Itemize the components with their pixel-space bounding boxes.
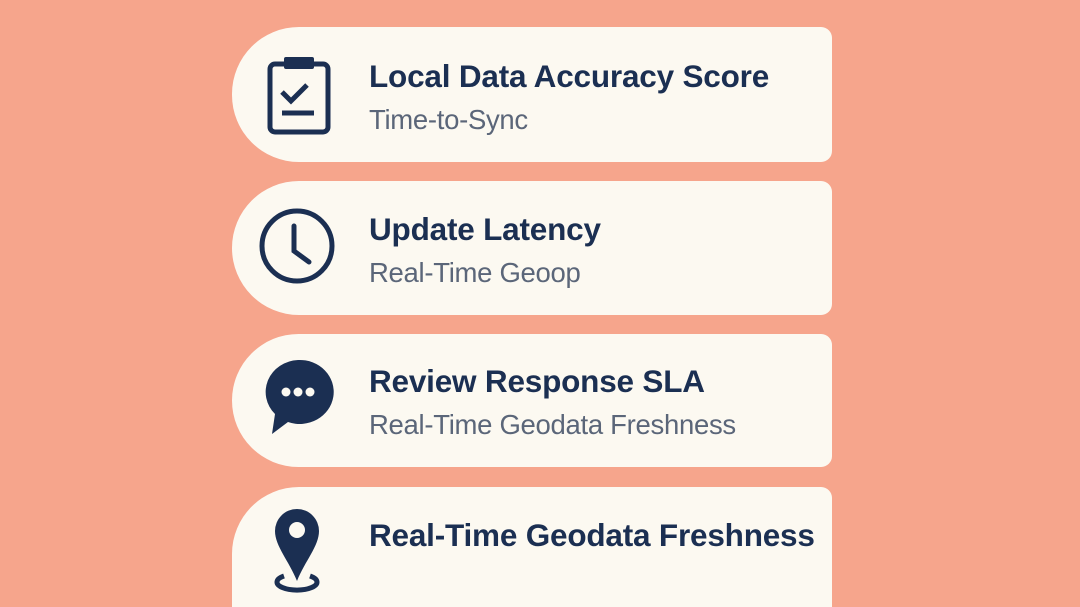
card: review response	[232, 334, 832, 467]
icon: clipboard	[268, 57, 330, 134]
subtitle: Real-Time Geodata Freshness	[369, 409, 736, 440]
icon: clock	[260, 208, 334, 284]
title: Update Latency	[369, 211, 601, 247]
card: geodata freshness	[232, 487, 832, 607]
title: Local Data Accuracy Score	[369, 58, 769, 94]
title: Review Response SLA	[369, 363, 705, 399]
subtitle: Real-Time Geoop	[369, 257, 581, 288]
card: update latency	[232, 181, 832, 315]
subtitle: Time-to-Sync	[369, 104, 528, 135]
icon: chat bubble	[266, 360, 334, 434]
card: local data accuracy	[232, 27, 832, 162]
icon: map pin	[274, 509, 320, 593]
title: Real-Time Geodata Freshness	[369, 517, 815, 553]
